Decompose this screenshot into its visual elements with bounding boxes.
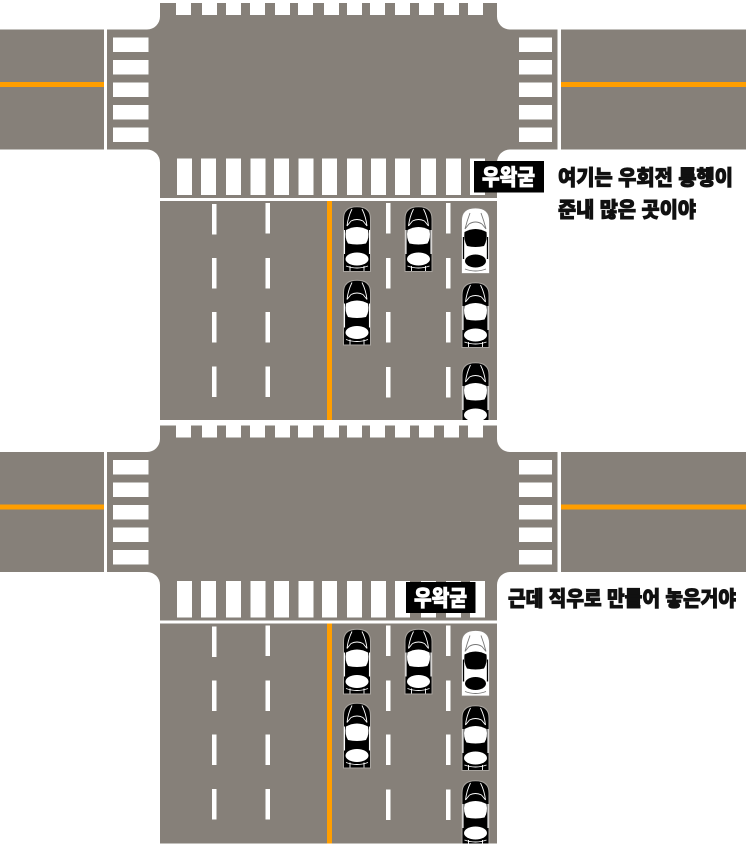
cars in queue bbox=[344, 207, 490, 428]
caption: upper two lines: 여기는 우회전 통행이 bbox=[558, 167, 733, 190]
crosswalk: left bbox=[113, 38, 148, 142]
cars in queue bbox=[344, 629, 490, 846]
label: 우왁굳 lower: 우왁굳 bbox=[414, 586, 467, 611]
panel: upper approach road bbox=[160, 201, 497, 428]
road surface bbox=[160, 624, 497, 844]
road surface bbox=[160, 201, 497, 420]
panel: lower approach road bbox=[160, 624, 497, 846]
orange centre line bbox=[327, 201, 332, 420]
crosswalk: bottom bbox=[177, 581, 485, 618]
crosswalk: left bbox=[113, 460, 148, 564]
lane dashes bbox=[212, 626, 450, 820]
junction surface bbox=[107, 426, 558, 620]
junction surface bbox=[107, 3, 558, 198]
caption: upper two lines: 준내 많은 곳이야 bbox=[558, 199, 696, 222]
panel: upper intersection bbox=[0, 3, 746, 198]
left road with centre line bbox=[0, 452, 104, 572]
orange centre line bbox=[327, 624, 332, 844]
crosswalk: right bbox=[519, 38, 552, 142]
crosswalk: top bbox=[176, 3, 483, 15]
crosswalk: top bbox=[176, 426, 483, 438]
panel: lower intersection bbox=[0, 426, 746, 620]
lane dashes bbox=[212, 203, 450, 398]
right road with centre line bbox=[561, 30, 746, 150]
right road with centre line bbox=[561, 452, 746, 572]
crosswalk: bottom bbox=[177, 158, 485, 195]
label: 우왁굳 upper: 우왁굳 bbox=[482, 165, 535, 190]
crosswalk: right bbox=[519, 460, 552, 564]
label: 우왁굳 upper bbox=[474, 161, 544, 192]
caption: upper two lines bbox=[558, 167, 733, 222]
left road with centre line bbox=[0, 30, 104, 150]
